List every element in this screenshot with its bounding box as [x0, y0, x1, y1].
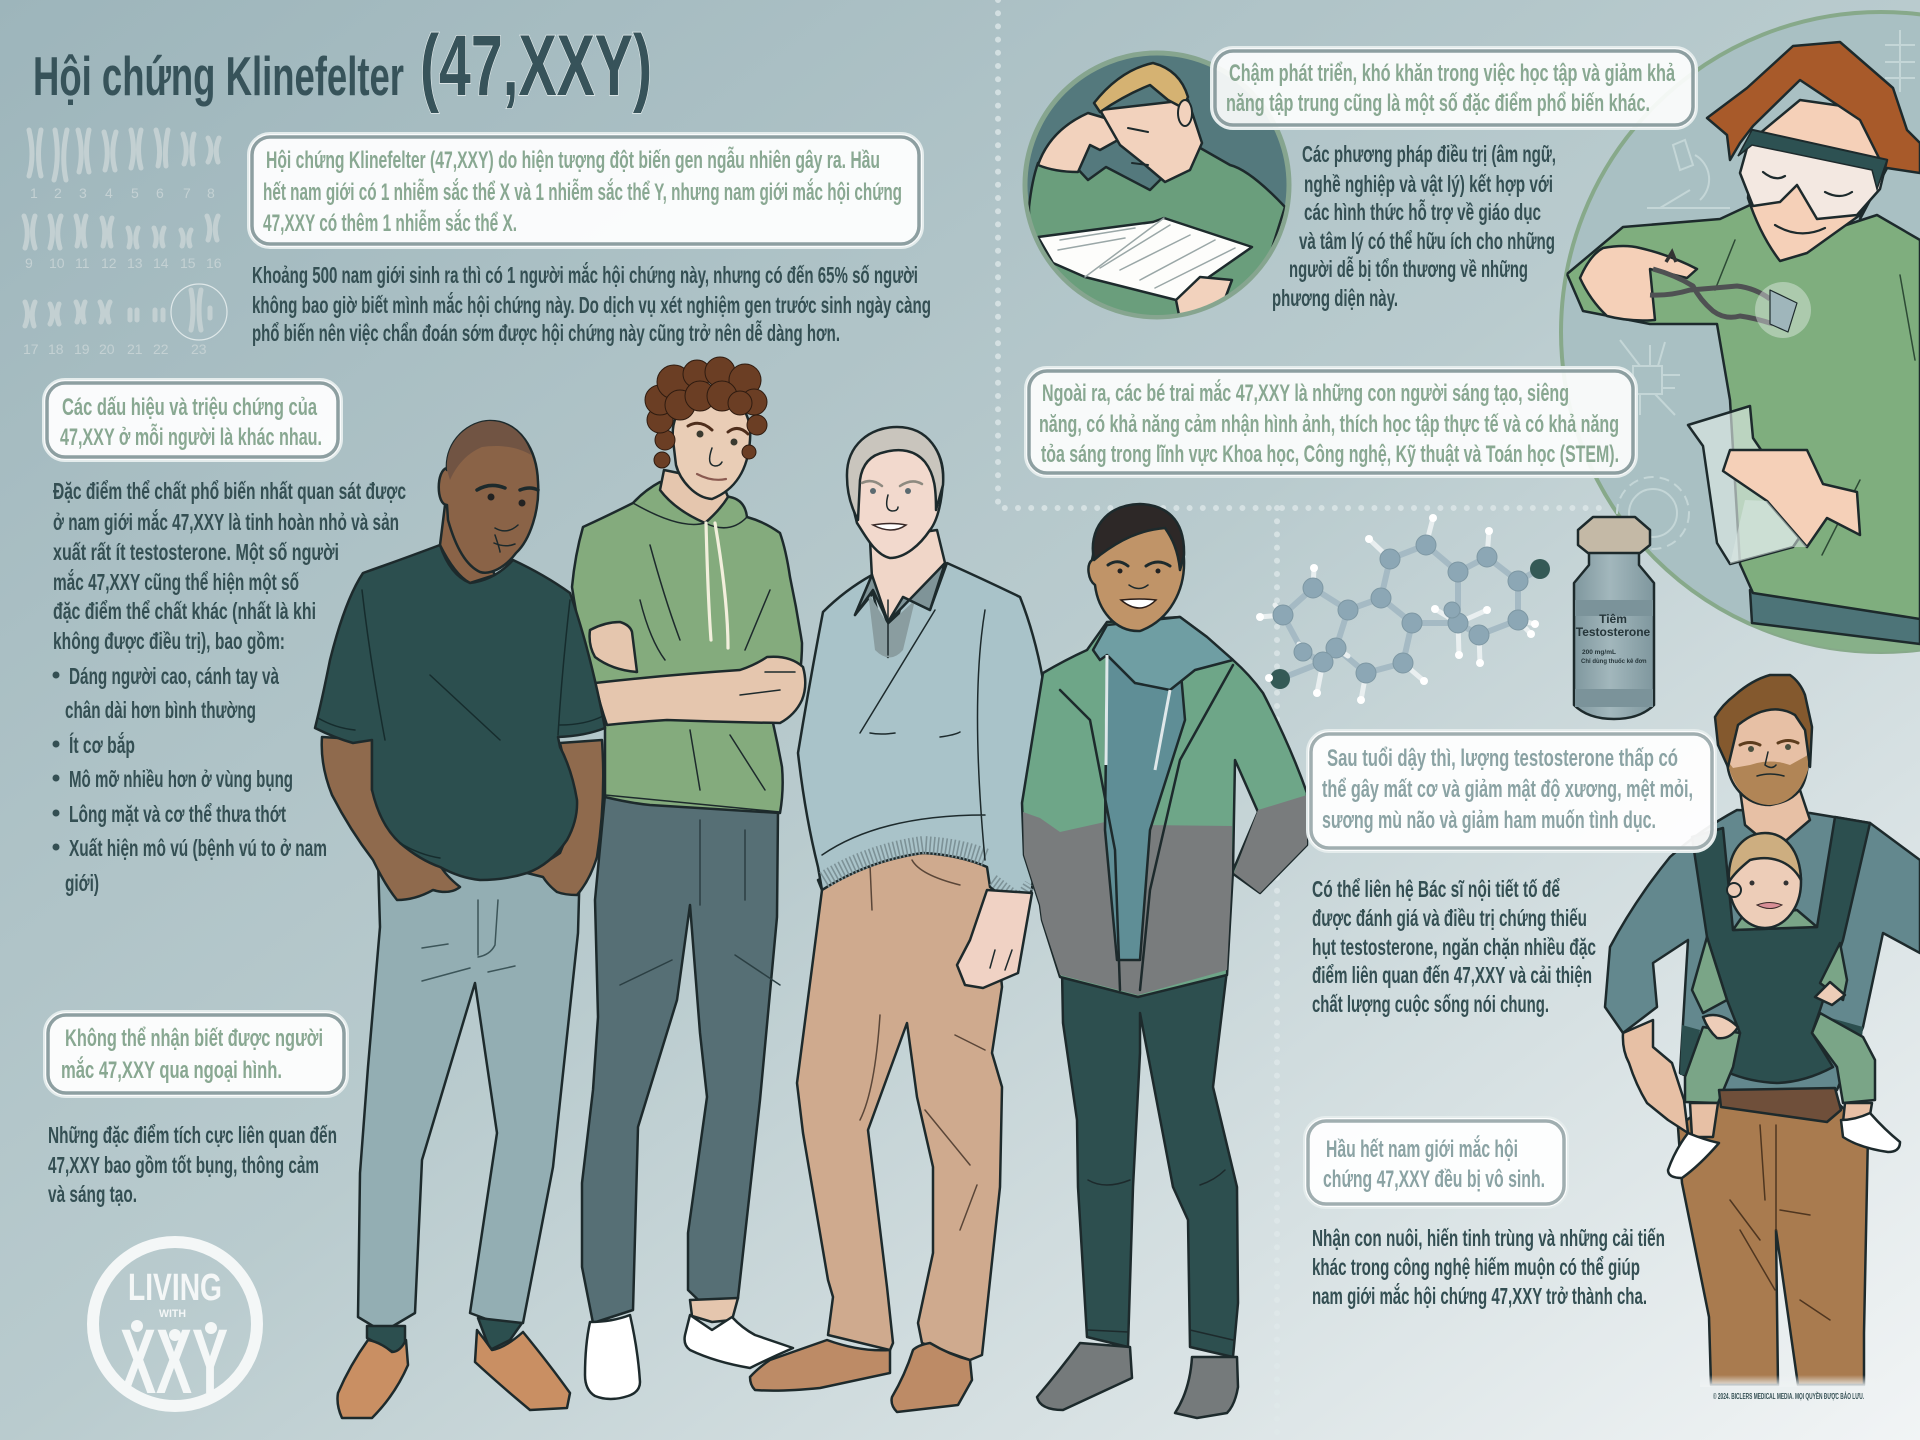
- text block: physical traits: giới): [65, 870, 99, 896]
- text block: physical traits: mắc 47,XXY cũng thể hiện một số: [53, 568, 299, 595]
- text block: physical traits: chân dài hơn bình thường: [65, 697, 256, 723]
- text block: therapies: Các phương pháp điều trị (âm ngữ,: [1302, 141, 1556, 167]
- callout: not recognisable: Không thể nhận biết được người: [65, 1025, 323, 1052]
- text block: endocrinologist: Có thể liên hệ Bác sĩ nội tiết tố để: [1312, 876, 1560, 902]
- text block: therapies: [1272, 141, 1556, 311]
- text block: prevalence: không bao giờ biết mình mắc hội chứng này. Do dịch vụ xét nghiệm gen trước sinh ngày càng: [252, 291, 931, 318]
- callout: infertility: [1304, 1117, 1568, 1208]
- text block: therapies: và tâm lý có thể hữu ích cho những: [1299, 228, 1555, 254]
- callout: STEM strengths: [1025, 367, 1637, 477]
- callout: developmental delay: năng tập trung cũng là một số đặc điểm phổ biến khác.: [1226, 90, 1650, 117]
- karyotype chart: 8: [207, 185, 215, 201]
- karyotype chart: 21: [127, 341, 143, 357]
- text block: therapies: người dễ bị tổn thương về những: [1289, 255, 1528, 282]
- callout: low testosterone: thể gây mất cơ và giảm mật độ xương, mệt mỏi,: [1322, 776, 1693, 803]
- illustration: young man in zip hoodie: [1022, 504, 1307, 1418]
- testosterone vial: [1574, 517, 1654, 719]
- karyotype chart: 22: [153, 341, 169, 357]
- callout: developmental delay: [1211, 47, 1697, 129]
- text block: fatherhood: nam giới mắc hội chứng 47,XXY trở thành cha.: [1312, 1282, 1647, 1309]
- text block: therapies: phương diện này.: [1272, 285, 1398, 311]
- illustration: shoes of older man: [750, 1340, 972, 1412]
- text block: therapies: nghề nghiệp và vật lý) kết hợp với: [1304, 171, 1553, 197]
- text block: physical traits: Mô mỡ nhiều hơn ở vùng bụng: [69, 766, 293, 792]
- karyotype chart: 4: [105, 185, 113, 201]
- callout: signs and symptoms: Các dấu hiệu và triệu chứng của: [62, 394, 317, 421]
- text block: physical traits: [52, 478, 406, 896]
- karyotype chart: 23: [191, 341, 207, 357]
- text block: endocrinologist: [1312, 876, 1596, 1017]
- karyotype chart: 18: [48, 341, 64, 357]
- karyotype chart: 1: [30, 185, 38, 201]
- callout: cause: [248, 133, 923, 248]
- karyotype chart: 19: [74, 341, 90, 357]
- callout: STEM strengths: năng, có khả năng cảm nhận hình ảnh, thích học tập thực tế và có khả năng: [1039, 411, 1619, 438]
- callout: not recognisable: mắc 47,XXY qua ngoại hình.: [61, 1056, 282, 1084]
- text block: positive traits: [48, 1122, 337, 1207]
- callout: infertility: chứng 47,XXY đều bị vô sinh.: [1323, 1166, 1545, 1193]
- karyotype chart: 14: [153, 255, 169, 271]
- text block: physical traits: Dáng người cao, cánh tay và: [69, 663, 279, 689]
- logo: Living with XXY: WITH: [159, 1308, 186, 1320]
- logo: Living with XXY: [93, 1242, 257, 1413]
- text block: physical traits: Đặc điểm thể chất phổ biến nhất quan sát được: [53, 478, 406, 504]
- karyotype chart: [23, 130, 227, 357]
- karyotype chart: 7: [183, 185, 191, 201]
- karyotype chart: 6: [156, 185, 164, 201]
- text block: positive traits: Những đặc điểm tích cực liên quan đến: [48, 1122, 337, 1148]
- callout: cause: Hội chứng Klinefelter (47,XXY) do hiện tượng đột biến gen ngẫu nhiên gây ra. Hầu: [266, 146, 880, 174]
- text block: endocrinologist: hụt testosterone, ngăn chặn nhiều đặc: [1312, 934, 1596, 960]
- text block: physical traits: Xuất hiện mô vú (bệnh vú to ở nam: [69, 835, 327, 861]
- karyotype chart: 12: [101, 255, 117, 271]
- text block: therapies: các hình thức hỗ trợ về giáo dục: [1304, 198, 1541, 225]
- text block: physical traits: ở nam giới mắc 47,XXY là tinh hoàn nhỏ và sản: [53, 508, 399, 535]
- callout: not recognisable: [44, 1011, 348, 1097]
- callout: cause: hết nam giới có 1 nhiễm sắc thể X và 1 nhiễm sắc thể Y, nhưng nam giới mắc hội chứng: [263, 178, 902, 206]
- text block: endocrinologist: chất lượng cuộc sống nói chung.: [1312, 991, 1549, 1017]
- scientist figure: [1567, 42, 1920, 670]
- karyotype chart: 2: [54, 185, 62, 201]
- title: Hội chứng Klinefelter: [33, 45, 404, 107]
- karyotype chart: 10: [49, 255, 65, 271]
- text block: fatherhood: khác trong công nghệ hiếm muộn có thể giúp: [1312, 1254, 1640, 1280]
- illustration: older man in sweater: [797, 427, 1043, 1360]
- callout: infertility: Hầu hết nam giới mắc hội: [1326, 1135, 1518, 1163]
- karyotype chart: 5: [131, 185, 139, 201]
- callout: cause: 47,XXY có thêm 1 nhiễm sắc thể X.: [263, 209, 517, 237]
- icon: science line art: [1617, 30, 1915, 549]
- callout: signs and symptoms: 47,XXY ở mỗi người là khác nhau.: [60, 423, 322, 451]
- text block: physical traits: không được điều trị), bao gồm:: [53, 628, 285, 654]
- logo: Living with XXY: LIVING: [128, 1267, 222, 1309]
- karyotype chart: 13: [127, 255, 143, 271]
- text block: prevalence: Khoảng 500 nam giới sinh ra thì có 1 người mắc hội chứng này, nhưng có đến 65% số người: [252, 261, 918, 288]
- karyotype chart: 9: [25, 255, 33, 271]
- karyotype chart: 11: [75, 255, 90, 271]
- karyotype chart: 15: [180, 255, 196, 271]
- illustration: man in dark t-shirt: [315, 421, 605, 1418]
- text block: endocrinologist: điểm liên quan đến 47,XXY và cải thiện: [1312, 962, 1592, 988]
- testosterone vial: Tiêm: [1599, 612, 1627, 626]
- title: (47,XXY): [420, 18, 652, 114]
- callout: low testosterone: [1307, 730, 1716, 852]
- callout: developmental delay: Chậm phát triển, khó khăn trong việc học tập và giảm khả: [1229, 60, 1675, 87]
- karyotype chart: 3: [79, 185, 87, 201]
- text block: positive traits: và sáng tạo.: [48, 1181, 137, 1207]
- testosterone vial: Testosterone: [1576, 625, 1651, 639]
- callout: STEM strengths: tỏa sáng trong lĩnh vực Khoa học, Công nghệ, Kỹ thuật và Toán học (STEM).: [1041, 441, 1619, 468]
- scientist circle panel: [1561, 12, 1920, 670]
- text block: endocrinologist: được đánh giá và điều trị chứng thiếu: [1312, 905, 1587, 931]
- text block: physical traits: đặc điểm thể chất khác (nhất là khi: [53, 598, 316, 624]
- text block: positive traits: 47,XXY bao gồm tốt bụng, thông cảm: [48, 1152, 319, 1178]
- callout: STEM strengths: Ngoài ra, các bé trai mắc 47,XXY là những con người sáng tạo, siêng: [1042, 379, 1569, 407]
- callout: low testosterone: Sau tuổi dậy thì, lượng testosterone thấp có: [1327, 745, 1678, 772]
- logo: Living with XXY: XXY: [120, 1311, 228, 1413]
- text block: physical traits: Ít cơ bắp: [69, 731, 135, 758]
- boy circle panel: [1025, 53, 1289, 330]
- text block: physical traits: xuất rất ít testosterone. Một số người: [53, 539, 339, 565]
- karyotype chart: 17: [23, 341, 39, 357]
- karyotype chart: 20: [99, 341, 115, 357]
- callout: low testosterone: sương mù não và giảm ham muốn tình dục.: [1322, 807, 1656, 834]
- text block: prevalence: [252, 261, 931, 346]
- illustration: father with baby: [1605, 675, 1920, 1387]
- testosterone vial: 200 mg/mL: [1582, 649, 1616, 656]
- text block: physical traits: Lông mặt và cơ thể thưa thớt: [69, 801, 286, 827]
- testosterone molecule: [1256, 514, 1550, 704]
- text block: fatherhood: [1312, 1225, 1665, 1309]
- text block: fatherhood: Nhận con nuôi, hiến tinh trùng và những cải tiến: [1312, 1225, 1665, 1251]
- illustration: man in green hoodie: [572, 357, 805, 1399]
- text block: prevalence: phổ biến nên việc chẩn đoán sớm được hội chứng này cũng trở nên dễ dàng hơn.: [252, 319, 840, 346]
- testosterone vial: Chỉ dùng thuốc kê đơn: [1581, 658, 1647, 665]
- title: [33, 18, 652, 114]
- karyotype chart: 16: [206, 255, 222, 271]
- callout: signs and symptoms: [43, 379, 342, 461]
